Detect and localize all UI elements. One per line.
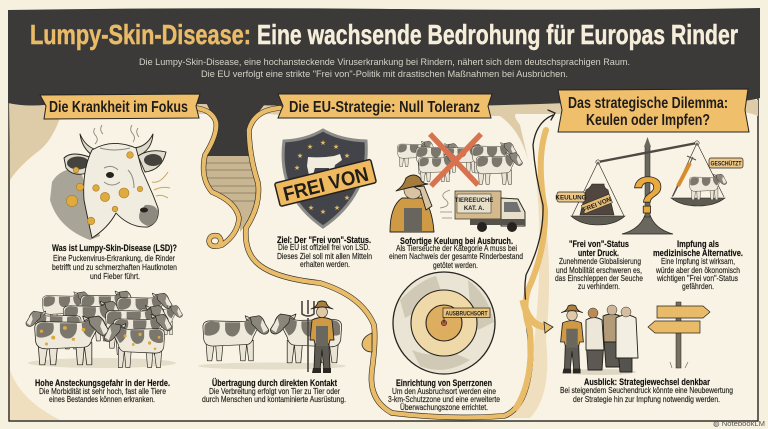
- illustration: balance scale: [571, 137, 727, 234]
- text: frei von status: zu verhindern.: [578, 281, 620, 291]
- icon: frei von shield: ★: [344, 194, 350, 202]
- text: direct contact: Übertragung durch direkten Kontakt: [212, 378, 338, 389]
- icon: question mark: ?: [632, 167, 664, 225]
- map: restriction zones: AUSBRUCHSORT: [446, 310, 488, 318]
- arrow: to dilemma heading: [516, 110, 555, 408]
- illustration: culled herd with cross: [397, 134, 522, 186]
- text: sperrzonen: Überwachungszone errichtet.: [400, 402, 488, 412]
- central dark and wood funnel: [202, 100, 268, 232]
- text: ausblick: Bei steigendem Seuchendruck könnte eine Neubewertung: [560, 385, 733, 395]
- text: ziel: Dieses Ziel soll mit allen Mitteln: [277, 251, 372, 261]
- text: herd: Die Morbidität ist sehr hoch, fast alle Tiere: [39, 386, 166, 396]
- text: impfung: Eine Impfung ist wirksam,: [661, 256, 735, 266]
- text: ausblick: [560, 377, 733, 404]
- text: keulung: getötet werden.: [433, 260, 478, 270]
- icon: frei von shield: ★: [320, 208, 326, 216]
- text: ziel: erhalten werden.: [300, 259, 350, 269]
- text: frei von status: und Mobilität erschweren es,: [556, 265, 642, 275]
- text: direct contact: durch Menschen und kontaminierte Ausrüstung.: [202, 394, 346, 404]
- arrow: to outlook: [523, 300, 553, 333]
- panel: torn paper shading: [9, 100, 758, 420]
- text: sperrzonen: 3-km-Schutzzone und eine erweiterte: [388, 394, 500, 404]
- icon: frei von shield: ★: [294, 164, 300, 172]
- text: ziel: Die EU ist offiziell frei von LSD.: [278, 242, 370, 252]
- text: direct contact: Die Verbreitung erfolgt von Tier zu Tier oder: [209, 386, 340, 396]
- text: direct contact: [202, 378, 346, 404]
- text: impfung: Impfung als: [677, 239, 719, 250]
- text: herd: Hohe Ansteckungsgefahr in der Herde.: [35, 378, 170, 389]
- label: keulung: [555, 192, 587, 202]
- text: keulung: Sofortige Keulung bei Ausbruch.: [400, 236, 513, 247]
- illustration: infected herd: [26, 291, 183, 368]
- heading: Das strategische Dilemma: Keulen oder Impfen?: [586, 112, 710, 129]
- text: ziel: Ziel: Der "Frei von"-Status.: [277, 235, 371, 246]
- text: sperrzonen: Um den Ausbruchsort werden eine: [392, 386, 496, 396]
- heading: Das strategische Dilemma: Das strategische Dilemma:: [568, 95, 728, 112]
- text: was ist LSD: Eine Puckenvirus-Erkrankung, die Rinder: [53, 253, 175, 263]
- text: frei von status: das Einschleppen der Seuche: [555, 273, 643, 283]
- heading: Die Krankheit im Fokus: [40, 94, 200, 119]
- text: ausblick: Ausblick: Strategiewechsel denkbar: [584, 377, 710, 388]
- text: sperrzonen: [388, 378, 500, 412]
- illustration: direct contact: [198, 300, 346, 373]
- title: Lumpy-Skin-Disease:: [30, 19, 251, 50]
- text: frei von status: unter Druck.: [578, 248, 619, 259]
- icon: frei von shield: ★: [308, 204, 314, 212]
- text: keulung: [389, 236, 523, 270]
- subtitle: [139, 56, 630, 79]
- text: frei von status: "Frei von"-Status: [569, 239, 629, 250]
- heading: Das strategische Dilemma: [558, 89, 749, 132]
- label: keulung: KEULUNG: [555, 194, 587, 202]
- icon: frei von shield: ★: [307, 143, 313, 151]
- icon: frei von shield: FREI VON: [281, 164, 371, 206]
- illustration: balance scale: FREI VON: [582, 196, 613, 214]
- heading: Die EU-Strategie: [278, 94, 492, 118]
- icon: frei von shield: [275, 130, 377, 227]
- text: was ist LSD: Was ist Lumpy-Skin-Disease (LSD)?: [52, 243, 177, 254]
- text: was ist LSD: und Fieber führt.: [90, 271, 140, 281]
- text: frei von status: [555, 239, 643, 291]
- icon: frei von shield: ★: [333, 143, 339, 151]
- text: was ist LSD: betrifft und zu schmerzhaften Hautknoten: [52, 262, 177, 272]
- label: geschützt: [709, 158, 743, 168]
- ribbon: left branch with curl: [196, 108, 239, 246]
- text: ziel: [277, 235, 372, 269]
- subtitle: Die EU verfolgt eine strikte "Frei von"-Politik mit drastischen Maßnahmen bei Ausbrüchen.: [201, 68, 568, 79]
- heading: Die Krankheit im Fokus: Die Krankheit im Fokus: [49, 99, 188, 116]
- text: frei von status: Zunehmende Globalisierung: [559, 256, 641, 266]
- subtitle: Die Lumpy-Skin-Disease, eine hochansteckende Viruserkrankung bei Rindern, nähert sich dem deutschsprachigen Raum.: [139, 56, 630, 67]
- map: restriction zones: [393, 272, 495, 374]
- text: sperrzonen: Einrichtung von Sperrzonen: [396, 378, 492, 389]
- illustration: truck: KAT. A.: [464, 206, 484, 212]
- header band: [8, 8, 760, 108]
- icon: frei von shield: ★: [320, 139, 326, 147]
- label: geschützt: GESCHÜTZT: [710, 160, 742, 168]
- text: keulung: Als Tierseuche der Kategorie A muss bei: [396, 243, 517, 253]
- text: impfung: gefährden.: [682, 281, 714, 291]
- text: impfung: medizinische Alternative.: [653, 248, 743, 259]
- illustration: group of experts: [561, 305, 638, 375]
- text: impfung: [653, 239, 743, 291]
- text: impfung: wichtigen "Frei von"-Status: [656, 273, 738, 283]
- icon: frei von shield: ★: [297, 152, 303, 160]
- heading: Die EU-Strategie: Die EU-Strategie: Null Toleranz: [289, 99, 480, 116]
- text: herd: [35, 378, 170, 404]
- illustration: distressed farmer: [390, 175, 434, 232]
- ribbon: central connector: [246, 108, 531, 417]
- text: ausblick: der Strategie hin zur Impfung notwendig werden.: [573, 394, 720, 404]
- title: [30, 19, 738, 50]
- illustration: sick cow head: [50, 125, 170, 240]
- text: impfung: würde aber den ökonomisch: [655, 265, 740, 275]
- illustration: truck: [440, 190, 525, 232]
- logo: NotebookLM: ◍ NotebookLM: [713, 419, 765, 428]
- icon: frei von shield: ★: [334, 204, 340, 212]
- illustration: signpost: [648, 302, 710, 368]
- panel: paper background: [9, 90, 758, 421]
- text: herd: eines Bestandes können erkranken.: [49, 394, 155, 404]
- text: was ist LSD: [52, 243, 177, 281]
- illustration: truck: TIEREEUCHE: [455, 198, 493, 204]
- icon: frei von shield: ★: [344, 152, 350, 160]
- text: keulung: einem Nachweis der gesamte Rinderbestand: [389, 251, 523, 261]
